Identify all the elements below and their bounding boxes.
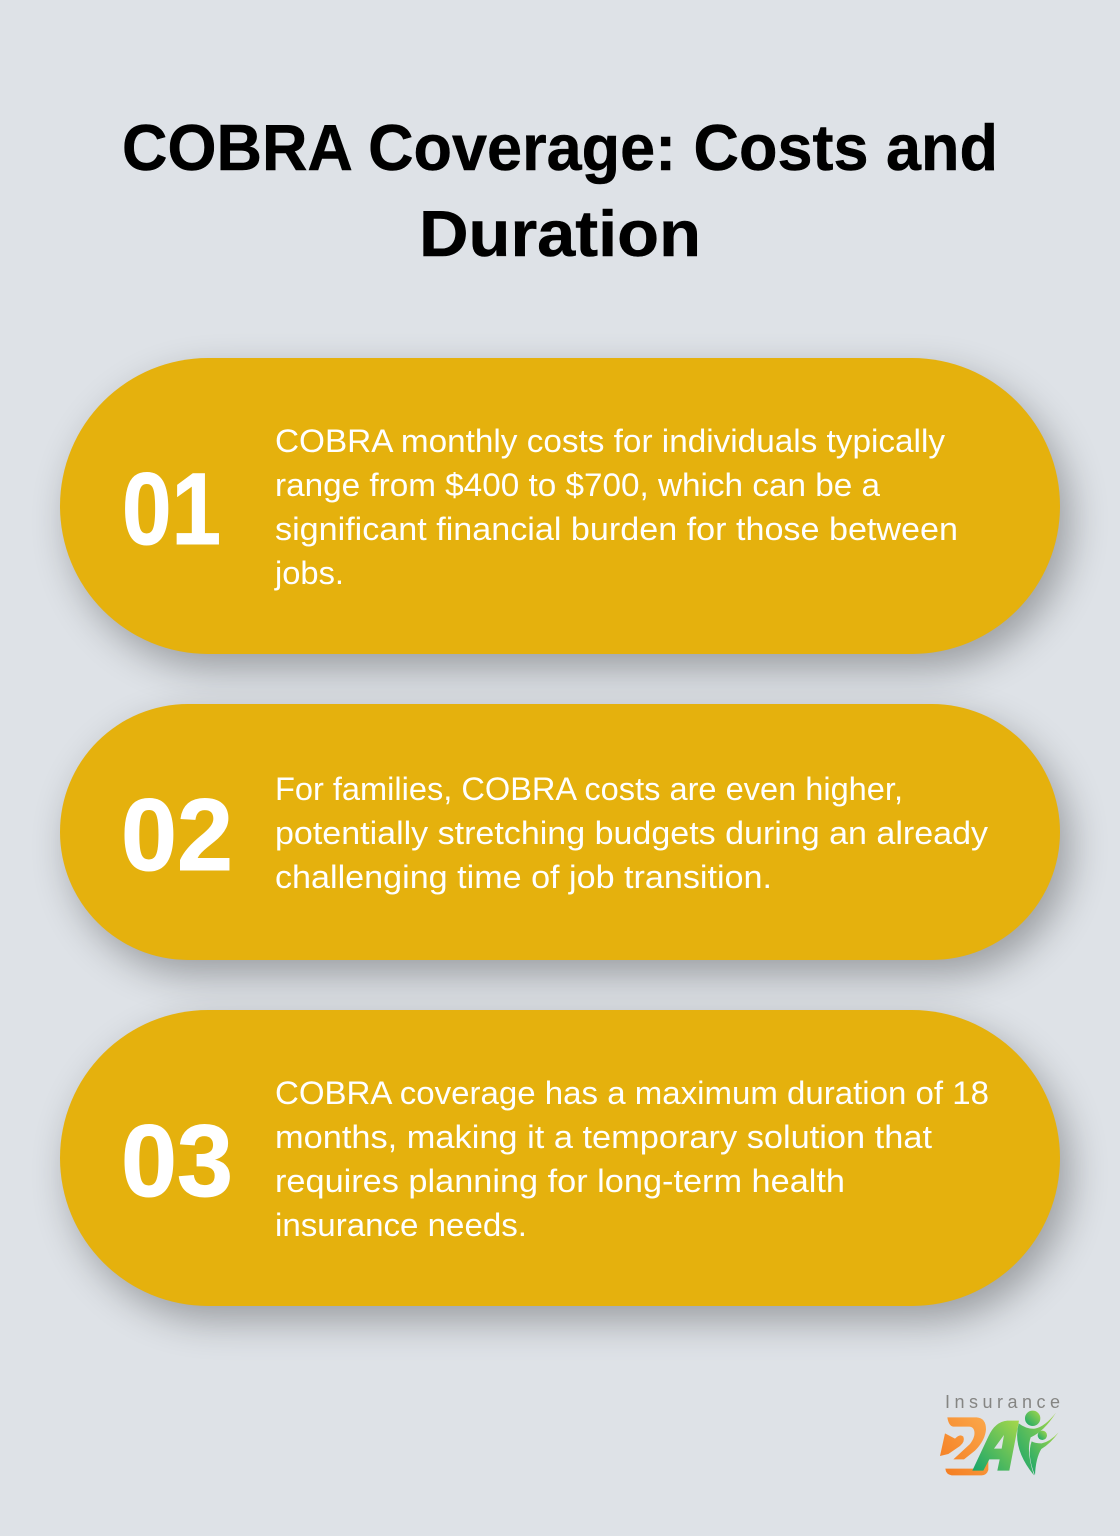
card 1 number: 01 xyxy=(122,452,221,566)
icon: orange numeral 2 with heart xyxy=(940,1417,988,1475)
card 2 number: 02 xyxy=(121,778,233,892)
card 2 text xyxy=(275,771,989,895)
card 3 text: requires planning for long-term health xyxy=(275,1163,845,1199)
card 3 number: 03 xyxy=(121,1104,233,1218)
logo: Insurance2Afi: Insurance xyxy=(945,1392,1060,1412)
card 1 text: significant financial burden for those between xyxy=(275,511,958,547)
panel: card 1 background xyxy=(60,358,1060,654)
title: Duration xyxy=(419,197,701,270)
card 1 text: jobs. xyxy=(274,555,344,591)
icon: green letter A xyxy=(972,1421,1019,1471)
card 1 text: range from $400 to $700, which can be a xyxy=(275,467,881,503)
card 2 text: For families, COBRA costs are even higher, xyxy=(275,771,903,807)
card 1 text: COBRA monthly costs for individuals typically xyxy=(275,423,946,459)
panel: card 3 background xyxy=(60,1010,1060,1306)
card 3 text: months, making it a temporary solution that xyxy=(275,1119,932,1155)
logo: Insurance2Afi xyxy=(940,1392,1060,1475)
card 1 text xyxy=(274,423,958,591)
title: COBRA Coverage: Costs and xyxy=(122,111,998,184)
title xyxy=(122,111,998,270)
panel: card 2 background xyxy=(60,704,1060,960)
card 2 text: potentially stretching budgets during an already xyxy=(275,815,989,851)
card 2 text: challenging time of job transition. xyxy=(275,859,772,895)
icon: adult figure xyxy=(1017,1411,1056,1475)
icon: child figure xyxy=(1030,1431,1059,1475)
card 3 text: insurance needs. xyxy=(275,1207,527,1243)
card 3 text xyxy=(275,1075,989,1243)
card 3 text: COBRA coverage has a maximum duration of 18 xyxy=(275,1075,989,1111)
